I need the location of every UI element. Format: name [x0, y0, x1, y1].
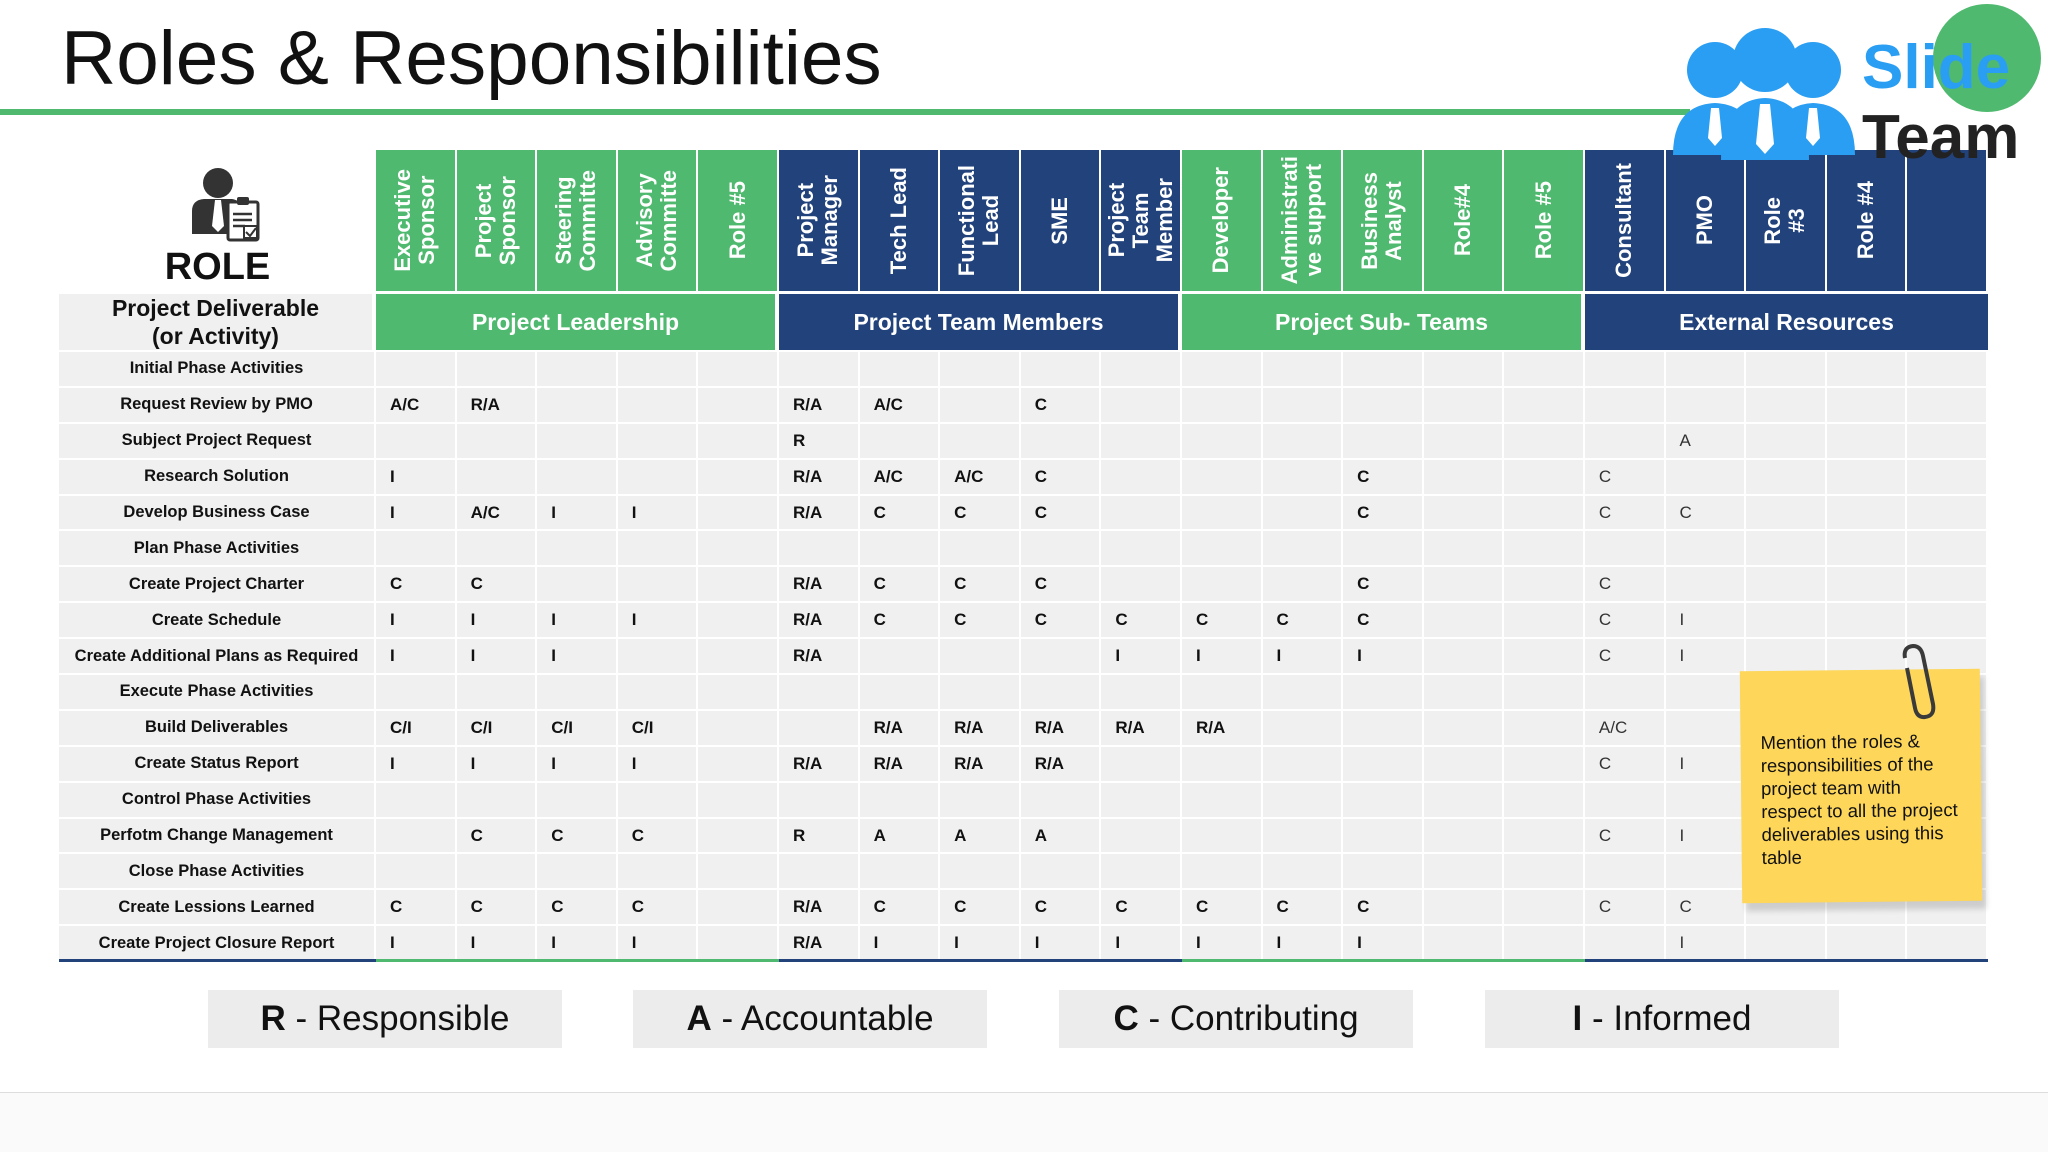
RACI table rows: A	[874, 826, 886, 845]
vertical role headers: Sponsor	[414, 176, 439, 265]
RACI table rows: C	[954, 502, 966, 522]
RACI table rows: C	[1035, 502, 1047, 522]
RACI table rows: C	[1599, 754, 1611, 773]
RACI table rows: Create Lessions Learned	[118, 898, 315, 916]
RACI table rows: I	[390, 502, 395, 522]
RACI table rows: I	[1115, 646, 1120, 665]
RACI table rows: C	[390, 897, 402, 916]
RACI table rows: I	[551, 610, 556, 629]
RACI table rows: C	[1035, 467, 1047, 486]
RACI table rows: C	[1680, 897, 1692, 916]
RACI table rows: C	[874, 897, 886, 916]
RACI table rows: I	[1035, 933, 1039, 952]
vertical role headers: SME	[1047, 197, 1072, 244]
RACI table rows: C	[1357, 897, 1369, 916]
RACI table rows: C/I	[471, 718, 492, 737]
RACI table rows: Initial Phase Activities	[130, 359, 303, 377]
vertical role headers: Analyst	[1381, 181, 1406, 260]
group bands: Project Sub- Teams	[1275, 308, 1488, 334]
RACI table rows: Research Solution	[144, 467, 289, 485]
RACI table rows: R/A	[874, 754, 903, 773]
RACI table rows: C	[1277, 897, 1289, 916]
RACI table rows: C	[954, 610, 966, 629]
vertical role headers: Tech Lead	[886, 167, 911, 274]
RACI table rows: I	[390, 933, 395, 952]
RACI table rows: I	[551, 933, 556, 952]
vertical role headers: Administrati	[1277, 156, 1302, 285]
legend: Accountable: A	[686, 999, 712, 1038]
RACI table rows: I	[551, 646, 556, 665]
RACI table rows: A	[954, 826, 966, 845]
RACI table rows: A/C	[874, 395, 903, 414]
RACI table rows: R	[793, 431, 805, 450]
legend: Contributing	[1059, 990, 1413, 1048]
vertical role headers	[376, 150, 1986, 291]
RACI table rows: I	[1680, 754, 1684, 773]
vertical role headers: Member	[1152, 178, 1177, 263]
RACI table rows: I	[632, 502, 637, 522]
legend: Accountable: - Accountable	[721, 999, 934, 1038]
RACI table rows: C	[1599, 467, 1611, 486]
RACI table rows: Create Project Closure Report	[99, 934, 334, 952]
RACI table rows: R/A	[874, 718, 903, 737]
RACI table rows: Plan Phase Activities	[134, 539, 299, 557]
RACI table rows: C	[874, 610, 886, 629]
legend: Contributing: - Contributing	[1148, 999, 1359, 1038]
RACI table rows: C	[551, 826, 563, 845]
RACI table rows: Close Phase Activities	[129, 862, 304, 880]
RACI table rows: C	[632, 897, 644, 916]
RACI table rows: Execute Phase Activities	[120, 682, 313, 700]
vertical role headers: PMO	[1692, 195, 1717, 246]
vertical role headers: Committe	[656, 170, 681, 271]
RACI table rows: C	[1357, 610, 1369, 629]
RACI table rows: C	[1599, 610, 1611, 629]
RACI table rows: I	[1680, 646, 1684, 665]
RACI table rows: C	[954, 574, 966, 593]
RACI table rows: I	[632, 610, 637, 629]
RACI table rows: I	[632, 933, 637, 952]
RACI table rows: Create Status Report	[134, 754, 299, 772]
RACI table rows: C	[471, 574, 483, 593]
RACI table rows: C	[1357, 574, 1369, 593]
RACI table rows: C	[1196, 897, 1208, 916]
sticky note	[1740, 669, 1982, 903]
RACI table rows: C	[471, 826, 483, 845]
RACI table rows: C	[1599, 574, 1611, 593]
RACI table rows: Build Deliverables	[145, 718, 288, 736]
RACI table rows: C	[1599, 646, 1611, 665]
RACI table rows: A/C	[1599, 718, 1627, 737]
RACI table rows: I	[471, 933, 475, 952]
RACI table rows: A	[1035, 826, 1047, 845]
RACI table rows: C	[1357, 467, 1369, 486]
logo: SlideTeam: Slide	[1862, 33, 2010, 102]
RACI table rows: I	[471, 754, 475, 773]
title underline	[0, 109, 1690, 115]
table bottom rule	[59, 959, 1988, 962]
RACI table rows: C	[632, 826, 644, 845]
RACI table rows	[59, 352, 1986, 959]
vertical role headers: Committe	[575, 170, 600, 271]
vertical role headers: Role#4	[1450, 184, 1475, 257]
logo: SlideTeam	[1673, 4, 2041, 165]
RACI table rows: R/A	[954, 718, 983, 737]
legend: Responsible: - Responsible	[295, 999, 510, 1038]
RACI table rows: I	[1680, 933, 1684, 952]
group bands: Project Team Members	[853, 308, 1104, 334]
RACI table rows: Create Project Charter	[129, 575, 304, 593]
vertical role headers: Executive	[390, 169, 415, 272]
RACI table rows: C	[954, 897, 966, 916]
RACI table rows: C	[1196, 610, 1208, 629]
vertical role headers: Role #5	[725, 181, 750, 260]
ROLE heading: ROLE	[165, 246, 270, 288]
legend: Informed: I	[1573, 999, 1582, 1038]
RACI table rows: I	[471, 610, 475, 629]
group bands: External Resources	[1679, 308, 1894, 334]
vertical role headers: Project	[471, 183, 496, 258]
RACI table rows: I	[551, 502, 556, 522]
RACI table rows: C	[1035, 574, 1047, 593]
RACI table rows: Develop Business Case	[123, 503, 310, 521]
RACI table rows: C	[874, 574, 886, 593]
legend: Accountable	[633, 990, 987, 1048]
RACI table rows: C	[471, 897, 483, 916]
RACI table rows: C	[1115, 897, 1128, 916]
RACI table rows: I	[874, 933, 878, 952]
RACI table rows: I	[390, 754, 395, 773]
RACI table rows: C	[1277, 610, 1289, 629]
RACI table rows: A/C	[874, 467, 903, 486]
RACI table rows: I	[390, 467, 395, 486]
legend: Responsible: R	[260, 999, 286, 1038]
RACI table rows: I	[551, 754, 556, 773]
RACI table rows: I	[1115, 933, 1120, 952]
group bands: (or Activity)	[152, 323, 279, 349]
RACI table rows: R/A	[954, 754, 983, 773]
RACI table rows: Perfotm Change Management	[100, 826, 333, 844]
vertical role headers: Advisory	[632, 173, 657, 268]
RACI table rows: I	[471, 646, 475, 665]
RACI table rows: Create Additional Plans as Required	[75, 647, 358, 665]
RACI table rows: Request Review by PMO	[120, 395, 313, 413]
title: Roles & Responsibilities	[61, 16, 882, 101]
vertical role headers: ve support	[1301, 164, 1326, 277]
RACI table rows: C/I	[390, 718, 412, 737]
group bands: Project Deliverable	[112, 295, 319, 321]
RACI table rows: I	[1680, 826, 1684, 845]
vertical role headers: Consultant	[1611, 163, 1636, 278]
RACI table rows: R/A	[471, 395, 500, 414]
legend: Contributing: C	[1113, 999, 1139, 1038]
sticky note: Mention the roles & responsibilities of the project team with respect to all the project deliverables using this table	[1760, 730, 1958, 868]
RACI table rows: C	[1680, 502, 1692, 522]
RACI table rows: R/A	[793, 574, 822, 593]
RACI table rows: R/A	[1035, 718, 1064, 737]
RACI table rows: C/I	[551, 718, 573, 737]
RACI table rows: C	[390, 574, 402, 593]
RACI table rows: A	[1680, 431, 1691, 450]
icon: paperclip	[1902, 644, 1936, 720]
RACI table rows: I	[1196, 933, 1201, 952]
RACI table rows: C	[1357, 502, 1369, 522]
RACI table rows: R/A	[793, 502, 822, 522]
vertical role headers: Lead	[978, 195, 1003, 246]
RACI table rows: R/A	[793, 467, 822, 486]
RACI table rows: I	[954, 933, 959, 952]
RACI table rows: I	[1357, 646, 1362, 665]
group bands	[59, 294, 1988, 350]
vertical role headers: Role #4	[1853, 181, 1878, 260]
RACI table rows: R/A	[793, 897, 822, 916]
RACI table rows: I	[632, 754, 637, 773]
RACI table rows: C	[1599, 826, 1611, 845]
vertical role headers: Role #5	[1531, 181, 1556, 260]
RACI table rows: Control Phase Activities	[122, 790, 311, 808]
RACI table rows: I	[1680, 610, 1684, 629]
RACI table rows: C	[1035, 897, 1047, 916]
RACI table rows: I	[1277, 933, 1281, 952]
RACI table rows: I	[390, 646, 395, 665]
vertical role headers: Sponsor	[495, 176, 520, 265]
RACI table rows: Create Schedule	[152, 611, 281, 629]
RACI table rows: I	[1357, 933, 1362, 952]
RACI table rows: R/A	[1196, 718, 1225, 737]
RACI table rows: C/I	[632, 718, 654, 737]
legend: Informed	[1485, 990, 1839, 1048]
vertical role headers: Steering	[551, 176, 576, 265]
RACI table rows: R/A	[793, 610, 822, 629]
RACI table rows: C	[1115, 610, 1128, 629]
RACI table rows: R/A	[793, 395, 822, 414]
RACI table rows: R	[793, 826, 805, 845]
vertical role headers: Manager	[817, 175, 842, 266]
RACI table rows: R/A	[793, 754, 822, 773]
RACI table rows: R/A	[1115, 718, 1145, 737]
vertical role headers: Developer	[1208, 167, 1233, 274]
footer band	[0, 1092, 2048, 1152]
legend: Informed: - Informed	[1592, 999, 1751, 1038]
RACI table rows: R/A	[1035, 754, 1064, 773]
legend: Responsible	[208, 990, 562, 1048]
vertical role headers: #3	[1784, 208, 1809, 233]
RACI table rows: I	[1277, 646, 1281, 665]
RACI table rows: I	[1196, 646, 1201, 665]
RACI table rows: I	[390, 610, 395, 629]
vertical role headers: Project	[793, 183, 818, 258]
vertical role headers: Team	[1128, 193, 1153, 248]
RACI table rows: R/A	[793, 933, 822, 952]
RACI table rows: Subject Project Request	[122, 431, 311, 449]
RACI table rows: C	[1035, 395, 1047, 414]
RACI table rows: A/C	[954, 467, 983, 486]
RACI table rows: A/C	[471, 502, 500, 522]
RACI table rows: C	[874, 502, 886, 522]
RACI table rows: C	[1599, 897, 1611, 916]
vertical role headers: Functional	[954, 165, 979, 276]
icon: role person with clipboard	[192, 168, 260, 242]
vertical role headers: Project	[1104, 183, 1129, 258]
RACI table rows: A/C	[390, 395, 419, 414]
vertical role headers: Business	[1357, 172, 1382, 269]
vertical role headers: Role	[1760, 197, 1785, 244]
RACI table rows: C	[551, 897, 563, 916]
group bands: Project Leadership	[472, 308, 679, 334]
RACI table rows: C	[1035, 610, 1047, 629]
RACI table rows: C	[1599, 502, 1611, 522]
RACI table rows: R/A	[793, 646, 822, 665]
